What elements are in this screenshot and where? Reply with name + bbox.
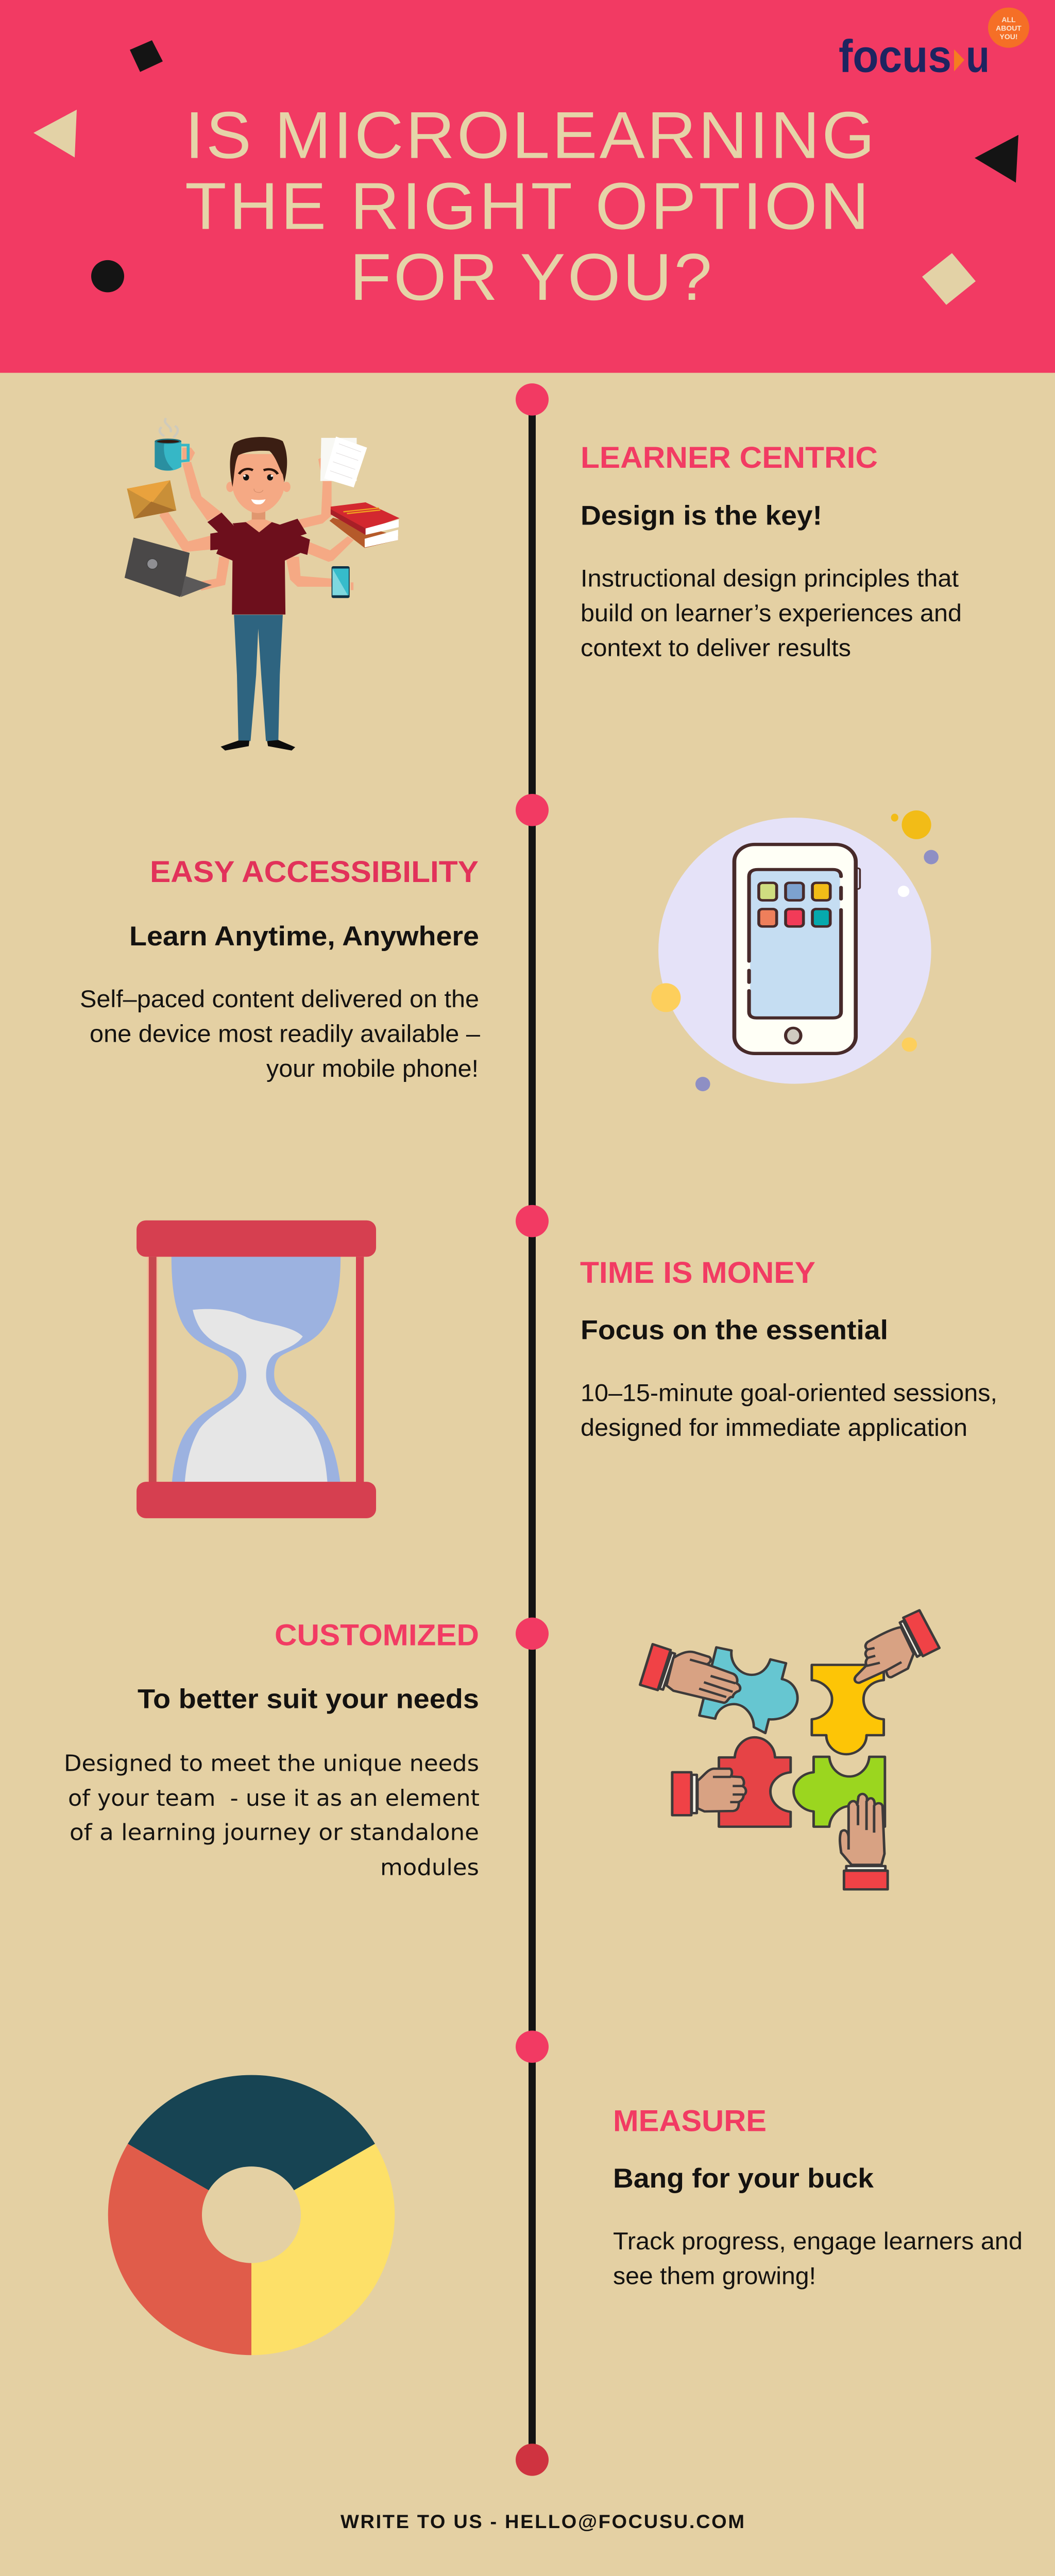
logo: focus u: YOU!: [1000, 32, 1017, 41]
illustration: puzzle hands: [640, 1610, 940, 1889]
text block: learner centric: [581, 440, 962, 662]
illustration: smartphone: [651, 810, 939, 1091]
icon: cream triangle: [33, 110, 77, 158]
logo: focus u: [839, 8, 1029, 82]
text block: easy accessibility: one device most readily available –: [90, 1021, 481, 1047]
text block: measure: MEASURE: [613, 2104, 767, 2138]
text block: easy accessibility: Learn Anytime, Anywhere: [129, 922, 479, 952]
icon: black circle: [91, 260, 124, 292]
text block: easy accessibility: your mobile phone!: [266, 1055, 479, 1082]
title: IS MICROLEARNING: [185, 98, 875, 172]
text block: customized: To better suit your needs: [138, 1684, 479, 1714]
text block: time is money: TIME IS MONEY: [580, 1256, 815, 1290]
text block: easy accessibility: EASY ACCESSIBILITY: [150, 855, 479, 889]
text block: measure: [613, 2104, 1023, 2290]
title: FOR YOU?: [350, 240, 712, 314]
title: THE RIGHT OPTION: [185, 169, 869, 243]
title: [185, 98, 875, 314]
illustration: hourglass: [137, 1221, 376, 1518]
footer contact: WRITE TO US - HELLO@FOCUSU.COM: [341, 2511, 744, 2532]
text block: easy accessibility: [80, 855, 481, 1082]
text block: customized: CUSTOMIZED: [275, 1618, 479, 1652]
text block: learner centric: context to deliver results: [581, 635, 851, 662]
text block: measure: see them growing!: [613, 2263, 816, 2290]
icon: black triangle: [975, 135, 1018, 182]
text block: customized: modules: [380, 1855, 479, 1881]
text block: customized: [64, 1618, 480, 1881]
panel: header banner: [0, 0, 1055, 373]
text block: time is money: [580, 1256, 997, 1442]
text block: measure: Track progress, engage learners and: [613, 2228, 1023, 2255]
logo: focus u: focus: [839, 31, 951, 82]
text block: time is money: 10–15-minute goal-oriented sessions,: [581, 1380, 997, 1407]
text block: learner centric: Instructional design principles that: [581, 565, 959, 592]
timeline with dots: [516, 383, 549, 2476]
text block: measure: Bang for your buck: [613, 2164, 874, 2194]
icon: cream diamond: [922, 253, 976, 305]
donut chart: [108, 2075, 395, 2355]
logo: focus u: u: [966, 31, 990, 82]
text block: customized: Designed to meet the unique needs: [64, 1751, 479, 1776]
text block: learner centric: build on learner’s experiences and: [581, 600, 962, 627]
icon: black rotated square: [130, 40, 163, 72]
text block: easy accessibility: Self–paced content delivered on the: [80, 986, 479, 1013]
illustration: multitasking man: [125, 418, 400, 751]
text block: customized: of your team - use it as an element: [68, 1785, 480, 1811]
text block: learner centric: LEARNER CENTRIC: [581, 440, 878, 474]
text block: learner centric: Design is the key!: [581, 501, 822, 531]
text block: time is money: designed for immediate application: [581, 1415, 967, 1442]
logo: focus u: ALL: [1001, 15, 1016, 24]
text block: customized: of a learning journey or standalone: [70, 1820, 479, 1845]
logo: focus u: ABOUT: [996, 24, 1022, 32]
text block: time is money: Focus on the essential: [581, 1315, 888, 1345]
